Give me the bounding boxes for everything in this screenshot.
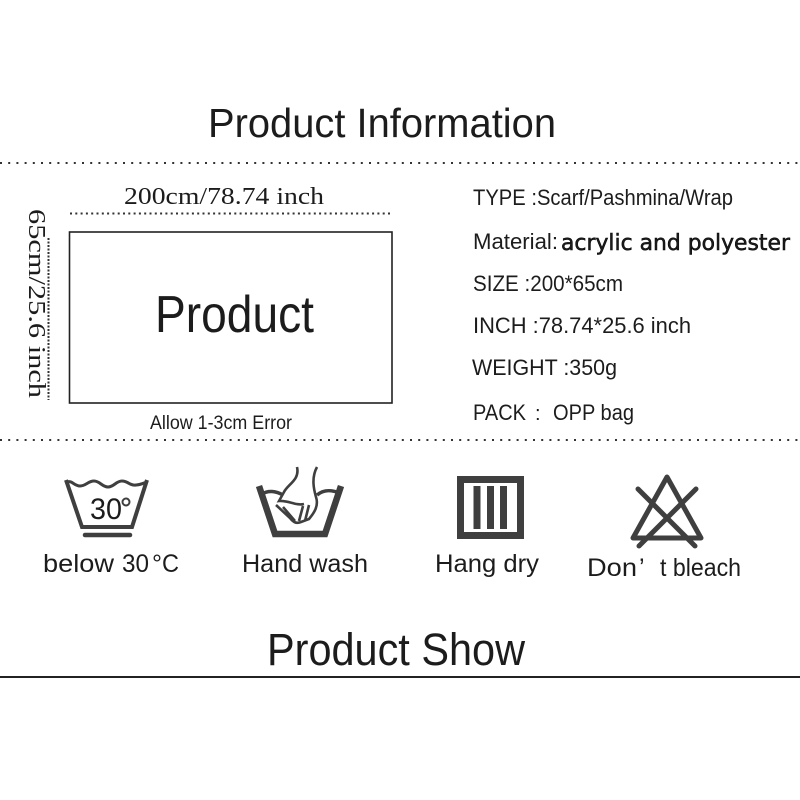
icon: hand wash xyxy=(259,467,341,534)
error note: Allow 1-3cm Error xyxy=(150,413,293,434)
label: Don't bleach: t bleach xyxy=(660,554,741,582)
icon: wash below 30 degrees: 30 xyxy=(90,493,122,526)
product label: Product xyxy=(155,286,314,344)
label: below 30°C: 30 xyxy=(122,550,149,578)
pack xyxy=(473,400,634,425)
label: below 30°C xyxy=(43,550,179,578)
label: below 30°C: below xyxy=(43,550,115,578)
size: SIZE :200*65cm xyxy=(473,271,623,296)
product size diagram xyxy=(23,183,392,434)
material: Material: xyxy=(473,229,558,254)
label: Don't bleach: Don xyxy=(587,554,637,582)
pack: : xyxy=(535,403,541,425)
icon: hang dry xyxy=(460,480,520,536)
icon: do not bleach xyxy=(633,477,701,546)
material value: acrylic and polyester xyxy=(561,231,791,256)
width label: 200cm/78.74 inch xyxy=(124,183,324,210)
weight: WEIGHT :350g xyxy=(472,355,617,380)
label: Hang dry: Hang dry xyxy=(435,550,539,578)
label: below 30°C: C xyxy=(162,550,179,578)
height label: 65cm/25.6 inch xyxy=(23,209,50,398)
product rectangle xyxy=(70,232,392,403)
pack: OPP bag xyxy=(553,400,634,425)
label: Hand wash: Hand wash xyxy=(242,550,368,578)
type: TYPE :Scarf/Pashmina/Wrap xyxy=(473,185,733,210)
inch: INCH :78.74*25.6 inch xyxy=(473,313,691,338)
pack: PACK xyxy=(473,400,526,425)
label: Don't bleach: ’ xyxy=(639,554,645,582)
title: Product Information: Product Information xyxy=(208,100,556,146)
product specifications xyxy=(472,185,791,425)
icon: wash below 30 degrees xyxy=(66,480,147,535)
label: below 30°C: ° xyxy=(152,550,162,578)
heading: Product Show: Product Show xyxy=(267,624,525,675)
label: Don't bleach xyxy=(587,554,741,582)
